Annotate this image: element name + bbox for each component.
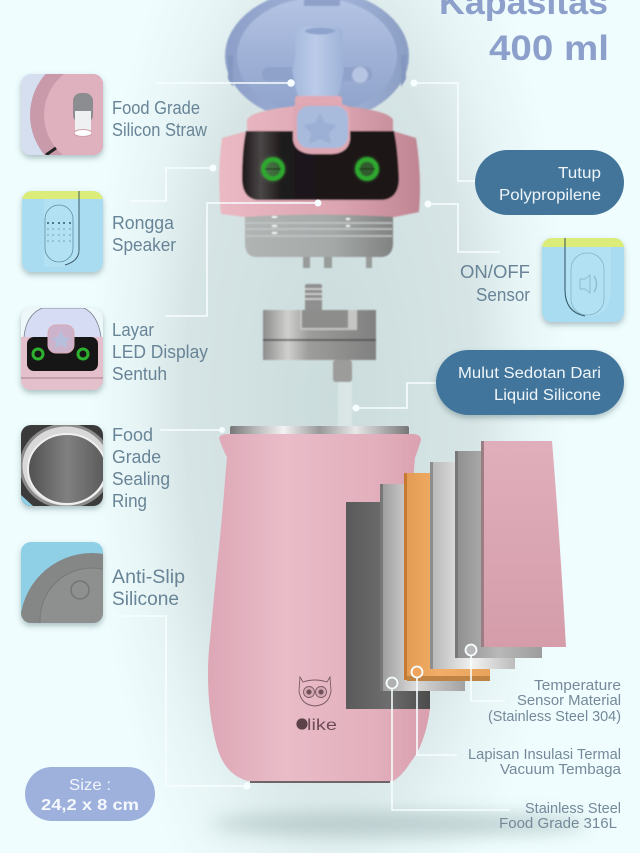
- pill: size: 24,2 x 8 cm: [41, 797, 139, 814]
- label: layar LED: [112, 320, 208, 384]
- pink head with LED display: [219, 104, 420, 268]
- layer: bright steel: [430, 462, 515, 669]
- pill: size: Size :: [69, 777, 111, 794]
- layer callout lines: [386, 644, 510, 810]
- label: temperature sensor material: Sensor Material: [517, 692, 621, 709]
- label: temperature sensor material: (Stainless Steel 304): [488, 708, 621, 725]
- label: anti-slip: Anti-Slip: [112, 567, 185, 588]
- label: on/off sensor: Sensor: [476, 285, 530, 305]
- steel rim: [230, 426, 409, 435]
- straw: [292, 27, 344, 98]
- layer: copper: [404, 473, 490, 680]
- head body: [219, 106, 420, 217]
- bottle logo: Olike owl: [299, 677, 331, 706]
- label: lapisan insulasi: Vacuum Tembaga: [500, 761, 622, 778]
- layer: steel 304: [455, 451, 542, 658]
- label: layar LED: Layar: [112, 320, 154, 340]
- label: stainless steel 316L: Food Grade 316L: [499, 815, 617, 832]
- label: lapisan insulasi: [468, 746, 622, 778]
- title: Kapasitas 400 ml: [439, 0, 609, 68]
- cutaway layers: [346, 441, 566, 709]
- layer: pink shell: [481, 441, 566, 647]
- straw crossbar: [262, 67, 372, 81]
- label: rongga speaker: [112, 213, 176, 255]
- label: on/off sensor: ON/OFF: [460, 262, 530, 282]
- bottle body: [208, 426, 430, 782]
- layer: stainless 316L: [380, 484, 465, 691]
- star button: [293, 104, 350, 154]
- label: rongga speaker: Rongga: [112, 213, 175, 233]
- thumbnail: on/off sensor: [542, 238, 624, 322]
- label: temperature sensor material: [488, 677, 621, 725]
- lid cap: [225, 0, 409, 122]
- lid with straw: [225, 0, 409, 122]
- label: sealing ring: [112, 425, 170, 511]
- label: sealing ring: Grade: [112, 447, 161, 467]
- thumbnail: silicon straw: [18, 74, 106, 161]
- clear tube: [338, 382, 352, 428]
- pill: mulut sedotan: Mulut Sedotan Dari: [458, 365, 601, 382]
- display screen: [242, 131, 399, 200]
- label: stainless steel 316L: Stainless Steel: [525, 800, 621, 817]
- pill: tutup polypropilene: Polypropilene: [499, 187, 601, 204]
- pink body: [208, 434, 430, 781]
- thumbnail: anti-slip silicone base: [18, 542, 106, 629]
- bottle body: like: [307, 717, 337, 734]
- connector: [333, 360, 352, 382]
- label: sealing ring: Ring: [112, 491, 147, 511]
- thumbnail: LED display: [21, 308, 103, 390]
- green rings: [261, 157, 379, 181]
- label: anti-slip: Silicone: [112, 589, 179, 610]
- threaded neck: [245, 213, 393, 257]
- bottle floor shadow: [210, 812, 590, 836]
- label: layar LED: Sentuh: [112, 364, 167, 384]
- label: anti-slip: [112, 567, 185, 610]
- label: food grade silicon straw: Food Grade: [112, 98, 200, 118]
- label: sealing ring: Sealing: [112, 469, 170, 489]
- label: layar LED: LED Display: [112, 342, 208, 362]
- thumbnail: sealing ring: [21, 425, 111, 507]
- label: stainless steel 316L: [499, 800, 621, 832]
- pill: size: [25, 767, 155, 821]
- label: food grade silicon straw: [112, 98, 208, 140]
- label: on/off sensor: [460, 262, 530, 305]
- label: temperature sensor material: Temperature: [534, 677, 621, 694]
- thumbnail: speaker: [22, 191, 103, 272]
- block: [263, 310, 376, 360]
- label: lapisan insulasi: Lapisan Insulasi Termal: [468, 746, 621, 763]
- metal valve block: [263, 284, 376, 428]
- pill: tutup polypropilene: [475, 150, 624, 215]
- label: food grade silicon straw: Silicon Straw: [112, 120, 208, 140]
- callout lines: [115, 79, 500, 789]
- title: Kapasitas 400 ml: 400 ml: [489, 29, 609, 68]
- pill: tutup polypropilene: Tutup: [558, 165, 601, 182]
- inner dark cavity: [346, 502, 430, 709]
- label: sealing ring: Food: [112, 425, 153, 445]
- bolt: [305, 284, 322, 311]
- pill: mulut sedotan: [436, 350, 624, 415]
- label: rongga speaker: Speaker: [112, 235, 176, 255]
- pill: mulut sedotan: Liquid Silicone: [494, 387, 601, 404]
